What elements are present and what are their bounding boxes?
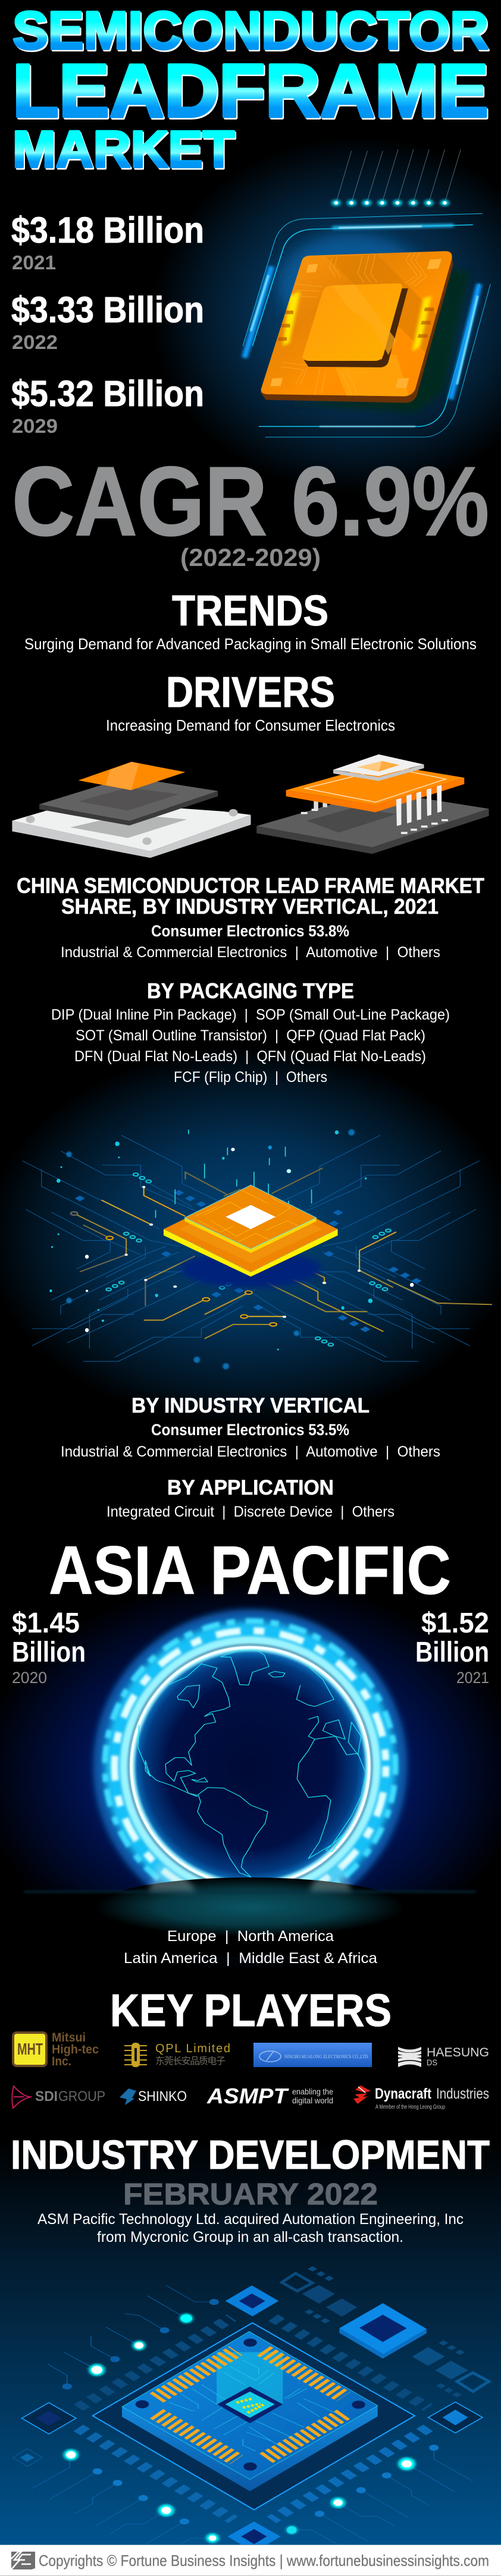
circuit leads and nodes [32, 2285, 473, 2544]
panel: China market share: Industrial & Commercial Electronics | Automotive | Others [61, 944, 440, 961]
cyan light rods [156, 1130, 312, 1228]
panel: industry development [11, 2132, 490, 2245]
neon frames [243, 213, 490, 437]
die [217, 2386, 283, 2423]
icon: orange processor chip with glow [243, 149, 490, 437]
chip: stacked orange plates [164, 1185, 338, 1276]
panel: China market share: Consumer Electronics 53.8% [151, 922, 349, 940]
market values: $5.32 Billion [11, 373, 204, 414]
chip die [302, 284, 408, 367]
logo: Mitsui High-tec [13, 2031, 99, 2068]
stat: 2020 value: 2020 [12, 1669, 47, 1687]
logo: Haesung DS [398, 2046, 489, 2067]
title [12, 1, 489, 178]
market values [11, 210, 204, 437]
central processor block [122, 2332, 378, 2491]
title: MARKET [12, 121, 234, 178]
panel: drivers: DRIVERS [166, 669, 335, 716]
market values: 2021 [12, 251, 56, 273]
panel: circuit board illustration [0, 1046, 501, 1427]
logo: ASMPT: enabling the [292, 2087, 333, 2096]
icon: glowing globe ring [100, 1616, 400, 1916]
panel: by industry vertical [61, 1394, 440, 1460]
panel: by application: BY APPLICATION [167, 1476, 334, 1499]
panel: Asia Pacific region [0, 1533, 501, 1971]
market values: 2022 [12, 331, 58, 353]
panel: China market share [17, 873, 484, 961]
panel: by industry vertical: BY INDUSTRY VERTICAL [131, 1394, 370, 1417]
panel: trends: TRENDS [172, 587, 328, 635]
lower plate shadow [180, 1250, 321, 1288]
stat: 2020 value: $1.45 [12, 1608, 80, 1639]
gold contact pads [156, 2351, 343, 2459]
market values: $3.18 Billion [11, 210, 204, 250]
panel: by packaging type: DIP (Dual Inline Pin Package) | SOP (Small Out-Line Package) [51, 1007, 450, 1023]
logo: Dynacraft Industries: Dynacraft [375, 2086, 432, 2102]
icon: assembled chip package, right [256, 754, 489, 854]
panel: China market share: SHARE, BY INDUSTRY VERTICAL, 2021 [61, 894, 439, 919]
central socket outline [93, 2323, 415, 2510]
other regions [124, 1928, 377, 1967]
logo: Shinko: SHINKO [138, 2089, 187, 2105]
panel: by application: Integrated Circuit | Discrete Device | Others [107, 1504, 394, 1520]
panel: by packaging type: BY PACKAGING TYPE [147, 979, 354, 1003]
other regions: Europe | North America [167, 1928, 334, 1945]
logo: Haesung DS: HAESUNG [427, 2046, 489, 2059]
gold trace ends [71, 1212, 278, 1326]
stat: 2020 value [12, 1608, 86, 1687]
circuit traces [23, 1136, 256, 1361]
logo: Shinko [120, 2089, 187, 2105]
pad rings [106, 1173, 391, 1346]
panel: by industry vertical: Consumer Electronics 53.5% [151, 1421, 349, 1439]
sparks [49, 1130, 372, 1350]
panel: by application [107, 1476, 394, 1520]
illustration: blue processor on circuit board [12, 2266, 489, 2552]
logo: Mitsui High-tec: High-tec [52, 2043, 99, 2056]
glowing light points [331, 149, 461, 206]
panel: by packaging type [51, 979, 450, 1086]
panel: industry development: FEBRUARY 2022 [123, 2177, 378, 2211]
logo: Dynacraft Industries: Industries [436, 2086, 489, 2102]
panel: drivers: Increasing Demand for Consumer Electronics [106, 716, 395, 734]
panel: by packaging type: FCF (Flip Chip) | Others [174, 1069, 327, 1086]
logo: ASMPT: digital world [292, 2096, 333, 2105]
stat: 2021 value: Billion [415, 1637, 489, 1668]
stat: 2021 value: 2021 [456, 1669, 489, 1687]
stat: 2020 value: Billion [12, 1637, 86, 1668]
panel: header with market values [11, 1, 501, 493]
floor reflection [0, 1861, 501, 1957]
panel: industry development: ASM Pacific Technology Ltd. acquired Automation Engineering, Inc [37, 2211, 464, 2228]
heading: ASIA PACIFIC [49, 1533, 451, 1609]
logo: Ningbo Hualong Electronics [253, 2043, 372, 2067]
glowing nodes [64, 2313, 415, 2543]
title: LEADFRAME [12, 49, 489, 133]
market values: $3.33 Billion [11, 290, 204, 330]
surrounding strips [79, 2318, 428, 2520]
CAGR figure: (2022-2029) [180, 543, 321, 571]
logo: QPL Limited: QPL Limited [155, 2042, 230, 2055]
logo: ASMPT: ASMPT [206, 2084, 289, 2108]
gold traces [74, 1168, 492, 1339]
panel: circuit background, lower section [0, 2140, 501, 2544]
thin inner traces [170, 2360, 336, 2451]
panel: by packaging type: DFN (Dual Flat No-Leads) | QFN (Quad Flat No-Leads) [74, 1048, 426, 1065]
logo: Dynacraft Industries: A Member of the Hong Leong Group [375, 2104, 445, 2111]
heading: KEY PLAYERS [110, 1985, 392, 2036]
footer [0, 2544, 501, 2576]
icon: exploded chip package, left [12, 762, 251, 858]
blue pads [75, 1190, 421, 1332]
market values: 2029 [12, 415, 58, 437]
logo: Dynacraft Industries [353, 2086, 489, 2111]
logo: ASMPT [206, 2084, 333, 2108]
stat: 2021 value: $1.52 [421, 1608, 489, 1639]
stat: 2021 value [415, 1608, 489, 1687]
logo: Haesung DS: DS [427, 2058, 437, 2067]
logo: Mitsui High-tec: MHT [17, 2040, 43, 2058]
panel: drivers [106, 669, 395, 734]
logo: QPL Limited: 东莞长安品质电子 [155, 2056, 226, 2067]
panel: key players [12, 1985, 489, 2111]
panel: industry development: from Mycronic Group in an all-cash transaction. [97, 2229, 403, 2245]
logo: SDI Group: SDI [35, 2089, 58, 2105]
panel: trends: Surging Demand for Advanced Packaging in Small Electronic Solutions [24, 635, 477, 653]
panel: by packaging type: SOT (Small Outline Transistor) | QFP (Quad Flat Pack) [76, 1027, 425, 1044]
satellite diamonds [12, 2266, 489, 2552]
logo: Ningbo Hualong Electronics: NINGBO HUALONG ELECTRONICS CO.,LTD. [284, 2054, 369, 2059]
title: SEMICONDUCTOR [12, 1, 489, 61]
logo: Mitsui High-tec: Mitsui [52, 2031, 86, 2045]
panel: trends [24, 587, 477, 653]
corner holes [136, 2339, 365, 2471]
icon: Fortune Business Insights logo [11, 2552, 35, 2569]
logo: Mitsui High-tec: Inc. [52, 2055, 71, 2068]
logo: QPL Limited [124, 2042, 230, 2067]
panel: by industry vertical: Industrial & Commercial Electronics | Automotive | Others [61, 1443, 440, 1460]
chip body [261, 251, 453, 403]
logo: SDI Group [12, 2086, 105, 2108]
other regions: Latin America | Middle East & Africa [124, 1950, 377, 1967]
logo: SDI Group: GROUP [58, 2089, 105, 2105]
map: continents outline [138, 1650, 366, 1877]
